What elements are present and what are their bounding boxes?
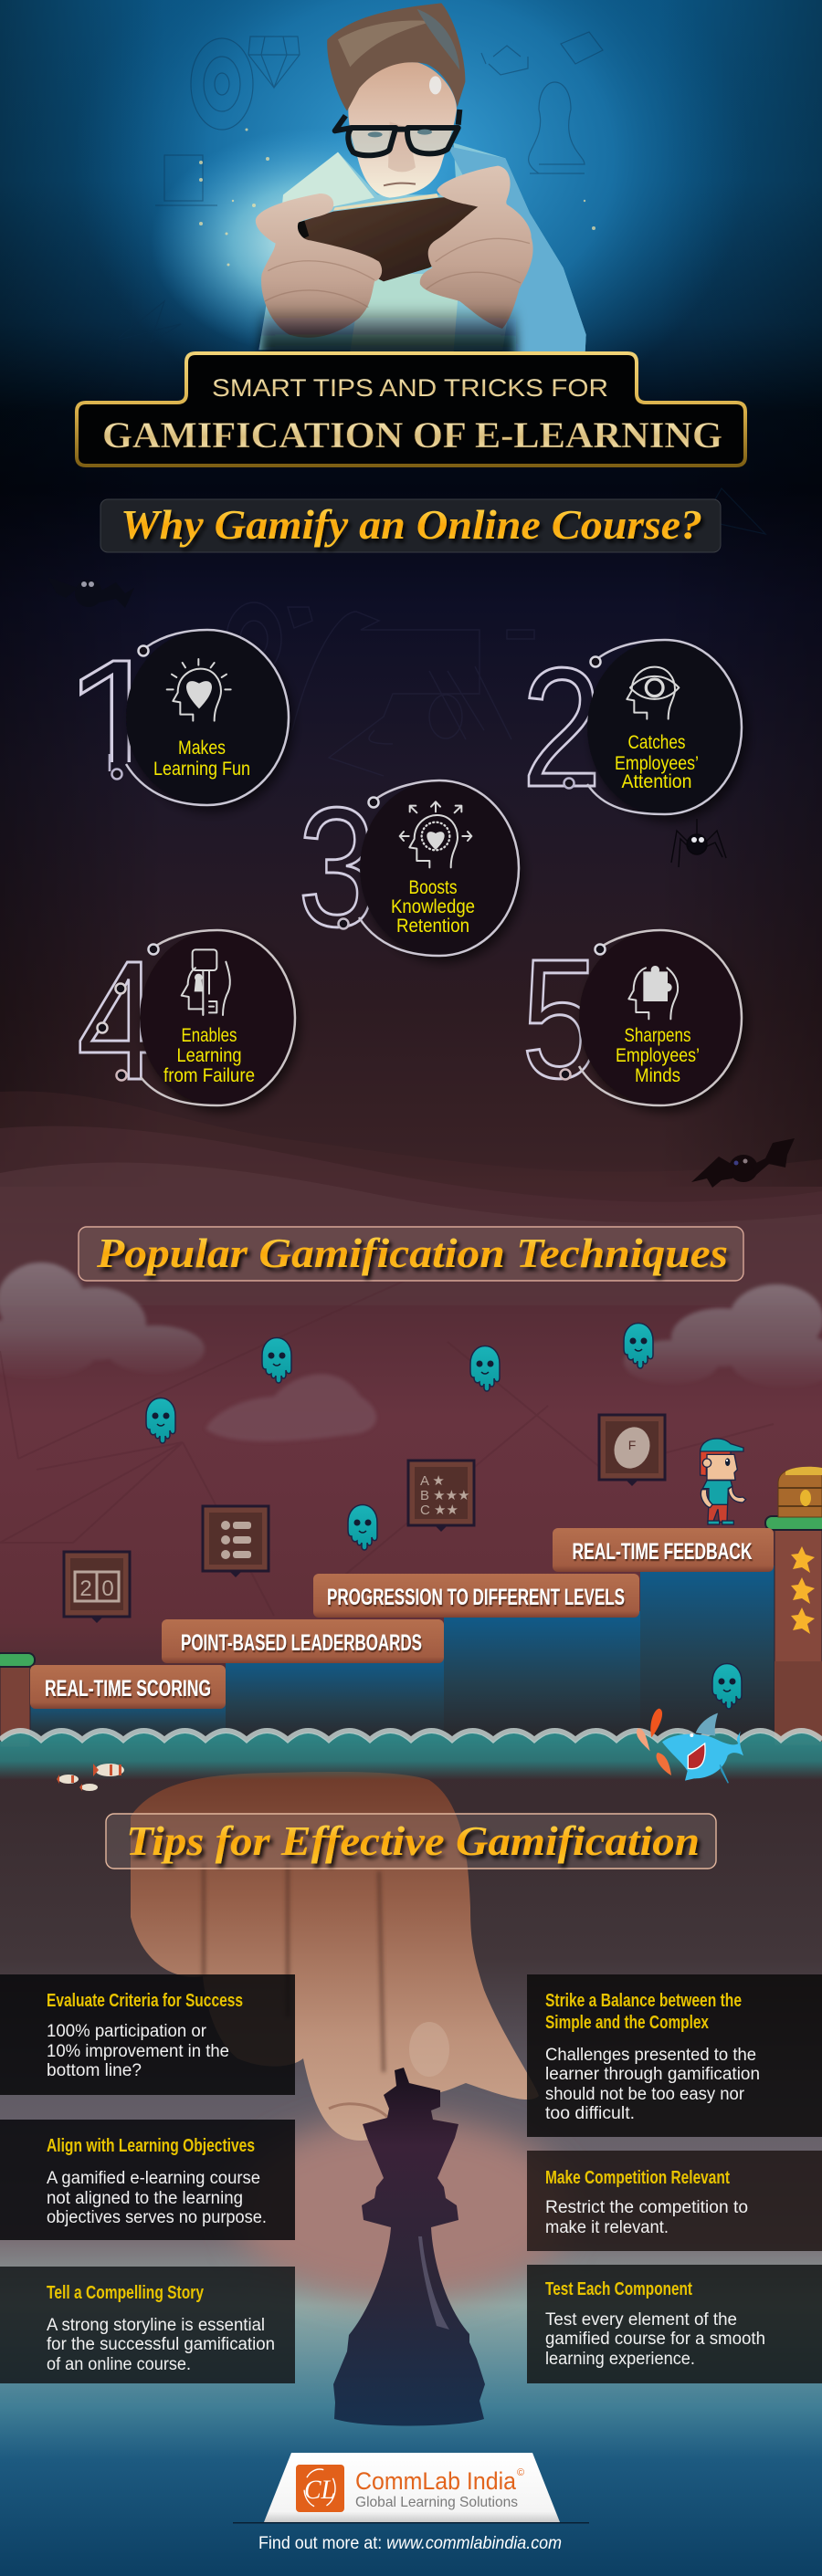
- tip: strike a balance: Strike a Balance between the: [545, 1991, 742, 2011]
- board: grades: B ★★★: [420, 1488, 470, 1503]
- board: grades: A ★: [420, 1473, 445, 1489]
- decorative bat top left: [47, 577, 134, 608]
- left ground: [0, 1653, 35, 1747]
- board: feedback: [599, 1415, 665, 1486]
- middle cloud: [206, 1374, 376, 1441]
- board: feedback: F: [628, 1438, 636, 1452]
- tip: tell a compelling story: of an online course.: [47, 2355, 191, 2374]
- icon: head with heart and light rays: [167, 659, 231, 721]
- numeral 3: 3: [298, 773, 376, 962]
- board: leaderboard: [203, 1506, 269, 1577]
- tip: strike a balance: should not be too easy nor: [545, 2085, 745, 2104]
- tip: tell a compelling story: for the successful gamification: [47, 2335, 275, 2354]
- tip: test each component: [527, 2265, 822, 2383]
- tip: make competition relevant: Restrict the competition to: [545, 2198, 748, 2217]
- stars on ground: [791, 1546, 815, 1634]
- numeral 1 stem extension: [109, 754, 111, 771]
- hero background doodles: [119, 32, 765, 534]
- player character: [701, 1439, 746, 1524]
- caption: Learning Fun: [153, 759, 250, 780]
- item 1: makes learning fun: [62, 625, 289, 814]
- tip: strike a balance: [527, 1974, 822, 2137]
- right cloud: [624, 1284, 822, 1387]
- title line 1: SMART TIPS AND TRICKS FOR: [212, 374, 608, 402]
- hero glow: [73, 0, 749, 438]
- glasses: [335, 110, 459, 155]
- numeral 4: 4: [77, 927, 160, 1115]
- tip: make competition relevant: [527, 2151, 822, 2251]
- item 4: enables learning from failure: [77, 927, 295, 1115]
- caption: Boosts: [409, 877, 457, 898]
- tip: strike a balance: learner through gamification: [545, 2065, 760, 2084]
- tip: align with learning objectives: [0, 2120, 295, 2240]
- item 3: boosts knowledge retention: [298, 773, 519, 962]
- sea water band: [0, 1731, 822, 1780]
- tip: align with learning objectives: Align with Learning Objectives: [47, 2136, 255, 2156]
- disc: [126, 630, 289, 805]
- section heading: why gamify: Why Gamify an Online Course?: [121, 502, 702, 548]
- caption: Sharpens: [625, 1025, 690, 1046]
- ring: [359, 780, 519, 956]
- treasure chest: [778, 1467, 822, 1517]
- caption: Enables: [181, 1025, 237, 1046]
- tip: tell a compelling story: [0, 2267, 295, 2383]
- water columns below platforms: [30, 1565, 775, 1744]
- platform: progression to different levels: [313, 1574, 639, 1618]
- numeral 5: 5: [522, 925, 599, 1114]
- numeral 1: 1: [62, 625, 172, 814]
- fish: [57, 1764, 124, 1791]
- platform: point-based leaderboards: POINT-BASED LEADERBOARDS: [181, 1630, 422, 1656]
- item 2: catches employees' attention: [522, 634, 743, 822]
- title banner: [77, 353, 745, 466]
- hero side vignette: [0, 0, 822, 1187]
- board: grades: C ★★: [420, 1503, 458, 1518]
- bottom scene: blurred arm behind the king: [233, 2118, 571, 2300]
- decorative bat right: [691, 1138, 795, 1188]
- ring: [579, 930, 742, 1105]
- disc: [140, 930, 295, 1105]
- tip: align with learning objectives: not aligned to the learning: [47, 2189, 243, 2208]
- shark with splashing leaves: [637, 1709, 743, 1783]
- background polygon lines: [0, 1260, 774, 1616]
- tip: test each component: Test every element of the: [545, 2310, 737, 2330]
- caption: Learning: [177, 1045, 241, 1066]
- caption: Retention: [396, 916, 469, 937]
- caption: Attention: [621, 771, 692, 792]
- face: [348, 62, 457, 198]
- platform: point-based leaderboards: [162, 1619, 444, 1663]
- tip: test each component: Test Each Component: [545, 2279, 692, 2299]
- shirt: [258, 143, 586, 351]
- board: score: [64, 1552, 130, 1623]
- board: score: 2: [79, 1576, 92, 1601]
- tip: tell a compelling story: A strong storyline is essential: [47, 2316, 265, 2335]
- tip: strike a balance: too difficult.: [545, 2104, 635, 2123]
- title line 2: GAMIFICATION OF E-LEARNING: [102, 414, 722, 456]
- tip: test each component: gamified course for a smooth: [545, 2330, 765, 2349]
- platform: real-time feedback: REAL-TIME FEEDBACK: [572, 1539, 753, 1565]
- section heading: tips for effective gamification: Tips for Effective Gamification: [126, 1817, 700, 1864]
- right hand: [420, 166, 533, 329]
- faint background doodle: tablet hand: [227, 602, 534, 776]
- company name: CommLab India: [355, 2467, 517, 2495]
- background swooshes: [0, 1091, 822, 1305]
- caption: [391, 877, 475, 937]
- hero fade to black: [260, 306, 516, 361]
- platform: real-time feedback: [553, 1528, 774, 1572]
- caption: Employees’: [615, 753, 699, 774]
- ring: [126, 630, 289, 805]
- ring: [141, 930, 295, 1105]
- tip: evaluate criteria for success: Evaluate Criteria for Success: [47, 1991, 243, 2011]
- tip: evaluate criteria for success: 100% participation or: [47, 2022, 207, 2041]
- bottom scene: hand: [131, 1772, 539, 2141]
- icon: head with key: [182, 949, 230, 1015]
- tip: evaluate criteria for success: 10% improvement in the: [47, 2042, 229, 2061]
- caption: from Failure: [163, 1065, 255, 1086]
- copyright mark: ©: [517, 2467, 524, 2478]
- numeral 2: 2: [522, 634, 602, 822]
- disc: [360, 780, 519, 956]
- right ground: [765, 1516, 822, 1745]
- platform: real-time scoring: [30, 1665, 226, 1709]
- ring: [587, 640, 742, 814]
- tip: evaluate criteria for success: bottom line?: [47, 2061, 142, 2080]
- tip: tell a compelling story: Tell a Compelling Story: [47, 2283, 205, 2303]
- icon: head with heart and arrows: [400, 801, 471, 867]
- tip: align with learning objectives: A gamified e-learning course: [47, 2169, 260, 2188]
- section heading: popular gamification techniques: Popular Gamification Techniques: [96, 1230, 728, 1276]
- phone: [290, 191, 494, 281]
- left hand: [256, 194, 382, 338]
- tip: make competition relevant: make it relevant.: [545, 2218, 669, 2237]
- platform: real-time scoring: REAL-TIME SCORING: [45, 1676, 211, 1702]
- tip: align with learning objectives: objectives serves no purpose.: [47, 2208, 267, 2227]
- tip: strike a balance: Simple and the Complex: [545, 2013, 709, 2033]
- decorative spider: [671, 819, 726, 867]
- disc: [579, 930, 742, 1105]
- caption: Knowledge: [391, 896, 475, 917]
- caption: Catches: [628, 732, 685, 753]
- tip: strike a balance: Challenges presented to the: [545, 2046, 756, 2065]
- icon: head with eye: [627, 667, 679, 719]
- caption: Minds: [635, 1065, 680, 1086]
- ghost enemies: [146, 1324, 742, 1709]
- hint boards: [64, 1415, 665, 1623]
- tip: make competition relevant: Make Competition Relevant: [545, 2168, 730, 2188]
- footer link: Find out more at: www.commlabindia.com: [258, 2534, 562, 2553]
- icon: head with puzzle piece: [628, 966, 678, 1019]
- disc: [587, 640, 743, 815]
- caption: [163, 1025, 255, 1086]
- banner frame: [77, 353, 745, 466]
- logo mark: CL: [304, 2475, 335, 2505]
- logo mark: [296, 2465, 344, 2512]
- caption: [616, 1025, 700, 1086]
- board: score: 0: [101, 1576, 114, 1601]
- left cloud: [0, 1262, 205, 1378]
- logo plate: [233, 2453, 589, 2523]
- tagline: Global Learning Solutions: [355, 2495, 518, 2510]
- board: grades: [408, 1461, 474, 1532]
- caption: [153, 738, 250, 780]
- item 5: sharpens employees' minds: [522, 925, 742, 1114]
- tip: test each component: learning experience.: [545, 2350, 695, 2369]
- tip: evaluate criteria for success: [0, 1974, 295, 2095]
- caption: [615, 732, 699, 792]
- platform: progression to different levels: PROGRESSION TO DIFFERENT LEVELS: [327, 1585, 625, 1610]
- caption: Makes: [178, 738, 226, 759]
- chess king: [333, 2068, 485, 2426]
- caption: Employees’: [616, 1045, 700, 1066]
- hero sparkles: [199, 128, 595, 267]
- hair: [327, 3, 465, 111]
- hero illustration: man playing on a phone: [256, 3, 586, 351]
